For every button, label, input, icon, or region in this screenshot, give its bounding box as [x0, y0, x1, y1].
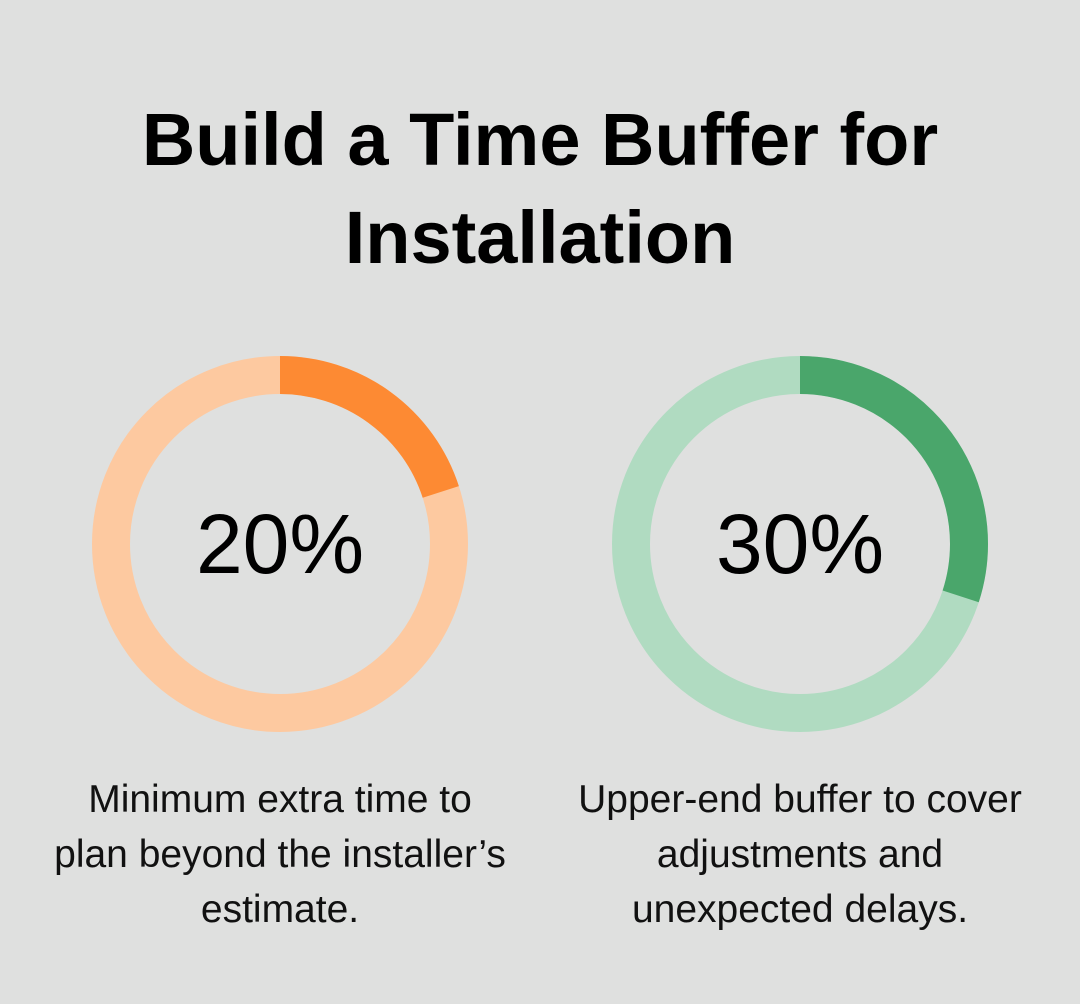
- percentage: 20%: 20%: [196, 497, 364, 591]
- description: right: Upper-end buffer to cover: [578, 778, 1022, 821]
- percentage: 30%: 30%: [716, 497, 884, 591]
- title: Build a Time Buffer for: [142, 98, 938, 181]
- donut: 20%: [92, 356, 468, 732]
- title: Installation: [345, 196, 735, 279]
- description: left: [54, 778, 506, 931]
- description: left: Minimum extra time to: [88, 778, 472, 821]
- donut: 30%: [612, 356, 988, 732]
- description: right: unexpected delays.: [632, 888, 968, 931]
- description: left: estimate.: [201, 888, 359, 931]
- title: [142, 98, 938, 279]
- description: left: plan beyond the installer’s: [54, 833, 506, 876]
- description: right: adjustments and: [657, 833, 943, 876]
- description: right: [578, 778, 1022, 931]
